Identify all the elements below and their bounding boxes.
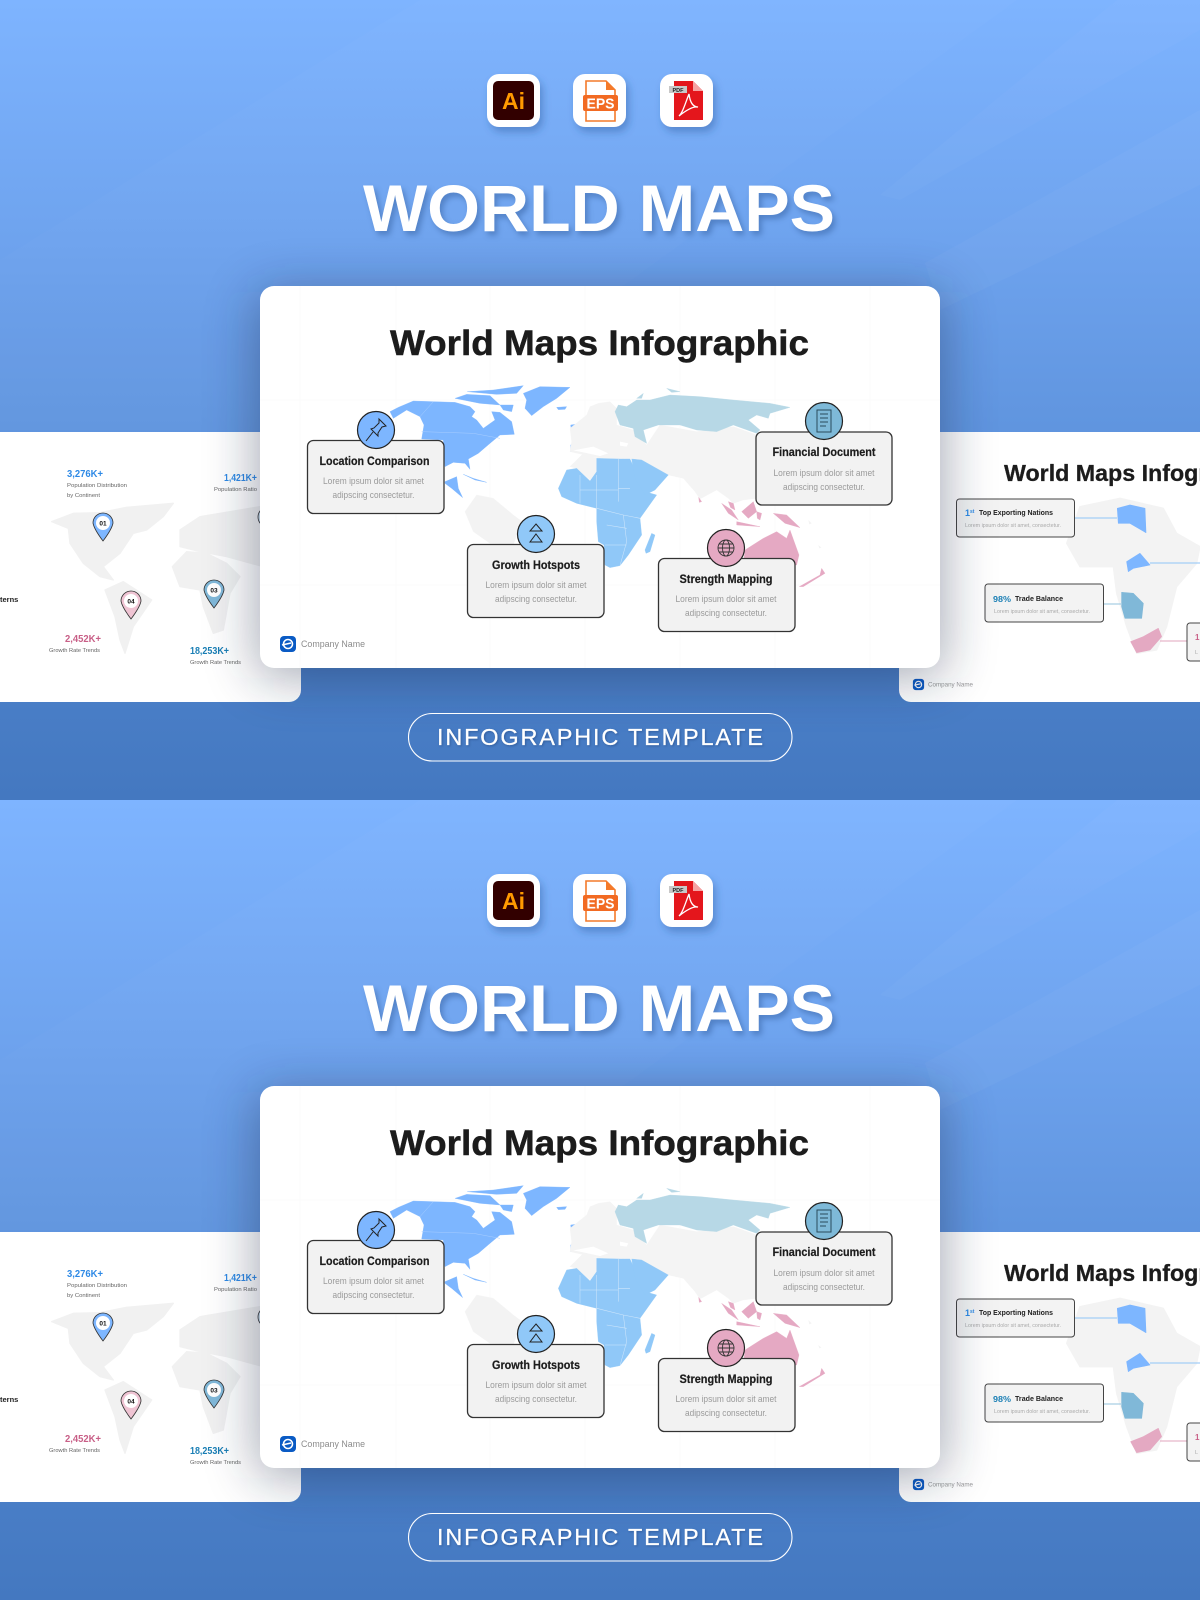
- callout: top exporting nations: Lorem ipsum dolor sit amet, consectetur.: [965, 1323, 1061, 1329]
- callout: trade balance: 98%: [993, 1394, 1011, 1404]
- panel: bottom poster section: [0, 800, 1200, 1600]
- callout: Strength Mapping: Lorem ipsum dolor sit amet: [676, 594, 777, 605]
- pin 01: [93, 1313, 113, 1341]
- world map: [390, 386, 825, 587]
- connector lines: [1075, 1318, 1200, 1363]
- callout: Growth Hotspots: [468, 1316, 604, 1418]
- pin partial: [258, 510, 260, 524]
- world map: [390, 1186, 825, 1387]
- stat: 3,276K+: [67, 469, 127, 499]
- stat: 18,253K+: 18,253K+: [190, 1446, 229, 1457]
- badge: infographic template: [408, 1514, 792, 1561]
- callout: Location Comparison: [308, 1212, 444, 1314]
- callout: top exporting nations: 1: [965, 1308, 970, 1318]
- icon: EPS file: EPS: [586, 96, 615, 112]
- stat: 18,253K+: Growth Rate Trends: [190, 1460, 241, 1466]
- stat: 1,421K+: [214, 1273, 257, 1293]
- pin 04: [121, 591, 141, 619]
- callout: clipped: L: [1195, 1450, 1198, 1456]
- stat: 2,452K+: 2,452K+: [65, 634, 101, 645]
- callout: Location Comparison: Lorem ipsum dolor sit amet: [323, 476, 424, 487]
- stat: 1,421K+: 1,421K+: [224, 1273, 257, 1284]
- callout: top exporting nations: 1: [965, 508, 970, 518]
- pin 04: [121, 1391, 141, 1419]
- stat: 3,276K+: Population Distribution: [67, 1283, 127, 1289]
- callout: Strength Mapping: Lorem ipsum dolor sit amet: [676, 1394, 777, 1405]
- icon: Adobe Illustrator: [487, 74, 540, 127]
- callout: Location Comparison: Location Comparison: [320, 1254, 430, 1268]
- pin 01: 01: [99, 1320, 107, 1327]
- pin 01: 01: [99, 520, 107, 527]
- company name small: Company Name: [928, 682, 973, 688]
- icon: PDF file: [660, 874, 713, 927]
- callout: Location Comparison: Lorem ipsum dolor sit amet: [323, 1276, 424, 1287]
- stat: 2,452K+: [49, 635, 101, 652]
- stat: 18,253K+: 18,253K+: [190, 646, 229, 657]
- stat: 3,276K+: by Continent: [67, 493, 100, 499]
- icon: PDF file: [660, 74, 713, 127]
- callout: top exporting nations: Lorem ipsum dolor sit amet, consectetur.: [965, 523, 1061, 529]
- background gradient: [0, 800, 1200, 1480]
- pin partial: [258, 1307, 278, 1327]
- callout: trade balance: Trade Balance: [1015, 1394, 1063, 1403]
- panel: right preview slide: [899, 432, 1200, 702]
- panel: right preview slide: [899, 1232, 1200, 1502]
- stat: 3,276K+: by Continent: [67, 1293, 100, 1299]
- callout: Financial Document: [756, 1202, 892, 1305]
- stat: 3,276K+: [67, 1269, 127, 1299]
- callout: Growth Hotspots: adipscing consectetur.: [495, 594, 577, 605]
- pin 04: 04: [127, 1398, 135, 1405]
- callout: clipped: L: [1195, 650, 1198, 656]
- callout: top exporting nations: st: [970, 509, 975, 515]
- callout: trade balance: Lorem ipsum dolor sit amet, consectetur.: [994, 1409, 1090, 1415]
- callout: Financial Document: Lorem ipsum dolor sit amet: [774, 468, 875, 479]
- callout: trade balance: [985, 1384, 1104, 1422]
- callout: Strength Mapping: adipscing consectetur.: [685, 1408, 767, 1419]
- panel: top poster section: [0, 0, 1200, 800]
- callout: Financial Document: [756, 402, 892, 505]
- panel: left preview slide: [0, 432, 301, 702]
- callout: Strength Mapping: Strength Mapping: [680, 572, 772, 586]
- stat: 1,421K+: Population Ratio: [214, 487, 257, 493]
- callout: Location Comparison: [308, 412, 444, 514]
- icon: EPS file: EPS: [586, 896, 615, 912]
- callout: Financial Document: Financial Document: [772, 1245, 876, 1259]
- company name: Company Name: [301, 1439, 365, 1449]
- callout: Growth Hotspots: adipscing consectetur.: [495, 1394, 577, 1405]
- stat: 1,421K+: 1,421K+: [224, 473, 257, 484]
- callout: top exporting nations: [956, 499, 1074, 537]
- callout: Financial Document: adipscing consectetur.: [783, 482, 865, 493]
- pin 04: 04: [127, 598, 135, 605]
- company name small: [913, 1479, 973, 1490]
- card shadow: [256, 292, 944, 678]
- stat: 2,452K+: Growth Rate Trends: [49, 1448, 100, 1454]
- icon: Adobe Illustrator: Ai: [502, 888, 525, 914]
- clipped label: terns: [0, 595, 18, 604]
- background gradient: [0, 0, 1200, 680]
- callout: top exporting nations: st: [970, 1309, 975, 1315]
- callout: Growth Hotspots: Lorem ipsum dolor sit amet: [486, 1380, 587, 1391]
- company name small: [913, 679, 973, 690]
- badge: infographic template: INFOGRAPHIC TEMPLATE: [437, 724, 763, 750]
- callout: Financial Document: Lorem ipsum dolor sit amet: [774, 1268, 875, 1279]
- callout: trade balance: [985, 584, 1104, 622]
- stat: 2,452K+: Growth Rate Trends: [49, 648, 100, 654]
- pin 01: [93, 513, 113, 541]
- icon: Adobe Illustrator: [487, 874, 540, 927]
- panel: left preview slide: [0, 1232, 301, 1502]
- company name: Company Name: [301, 639, 365, 649]
- company name: [280, 1436, 365, 1452]
- callout: Growth Hotspots: Growth Hotspots: [492, 558, 580, 572]
- title: WORLD MAPS: [363, 971, 835, 1045]
- stat: 3,276K+: 3,276K+: [67, 1269, 103, 1280]
- callout: Strength Mapping: [658, 530, 795, 632]
- callout: Financial Document: adipscing consectetur.: [783, 1282, 865, 1293]
- stat: 18,253K+: [190, 647, 241, 664]
- stat: 3,276K+: 3,276K+: [67, 469, 103, 480]
- card shadow: [256, 1092, 944, 1478]
- stat: 1,421K+: [214, 474, 257, 492]
- slide heading: World Maps Infographic: [390, 324, 809, 363]
- icon: EPS file: [573, 74, 626, 127]
- format icons row: [487, 874, 713, 927]
- stat: 2,452K+: [49, 1434, 101, 1454]
- callout: Growth Hotspots: Lorem ipsum dolor sit amet: [486, 580, 587, 591]
- callout: Location Comparison: Location Comparison: [320, 454, 430, 468]
- icon: EPS file: [573, 874, 626, 927]
- callout: top exporting nations: Top Exporting Nations: [979, 1308, 1053, 1317]
- callout: Location Comparison: adipscing consectetur.: [332, 490, 414, 501]
- callout: Financial Document: Financial Document: [772, 445, 876, 459]
- callout: Growth Hotspots: [468, 516, 604, 618]
- pin 03: [204, 1380, 224, 1408]
- format icons row: [487, 74, 713, 127]
- icon: PDF file: PDF: [672, 888, 684, 894]
- panel: main slide card: [260, 286, 940, 668]
- callout: Growth Hotspots: Growth Hotspots: [492, 1358, 580, 1372]
- badge: infographic template: [408, 714, 792, 761]
- stat: 18,253K+: [190, 1446, 241, 1466]
- callout: trade balance: Trade Balance: [1015, 594, 1063, 603]
- pin 03: [204, 580, 224, 608]
- company name small: Company Name: [928, 1482, 973, 1488]
- callout: clipped: 1: [1195, 1433, 1200, 1442]
- stat: 3,276K+: Population Distribution: [67, 483, 127, 489]
- callout: Strength Mapping: Strength Mapping: [680, 1372, 772, 1386]
- panel: main slide card: [260, 1086, 940, 1468]
- stat: 1,421K+: Population Ratio: [214, 1287, 257, 1293]
- stat: 2,452K+: 2,452K+: [65, 1434, 101, 1445]
- callout: clipped: [1187, 1423, 1200, 1461]
- callout: clipped: 1: [1195, 633, 1200, 642]
- icon: PDF file: PDF: [672, 88, 684, 94]
- icon: Adobe Illustrator: Ai: [502, 88, 525, 114]
- callout: Location Comparison: adipscing consectetur.: [332, 1290, 414, 1301]
- connector lines: [1075, 518, 1200, 563]
- callout: clipped: [1187, 623, 1200, 661]
- callout: top exporting nations: Top Exporting Nations: [979, 508, 1053, 517]
- slide heading: World Maps Infographic: [390, 1124, 809, 1163]
- title: WORLD MAPS: [363, 171, 835, 245]
- callout: Strength Mapping: [658, 1330, 795, 1432]
- pin 03: 03: [210, 1387, 218, 1394]
- company name: [280, 636, 365, 652]
- callout: trade balance: Lorem ipsum dolor sit amet, consectetur.: [994, 609, 1090, 615]
- clipped label: terns: [0, 1395, 18, 1404]
- callout: top exporting nations: [956, 1299, 1074, 1337]
- badge: infographic template: INFOGRAPHIC TEMPLATE: [437, 1524, 763, 1550]
- stat: 18,253K+: Growth Rate Trends: [190, 660, 241, 666]
- callout: trade balance: 98%: [993, 594, 1011, 604]
- callout: Strength Mapping: adipscing consectetur.: [685, 608, 767, 619]
- pin 03: 03: [210, 587, 218, 594]
